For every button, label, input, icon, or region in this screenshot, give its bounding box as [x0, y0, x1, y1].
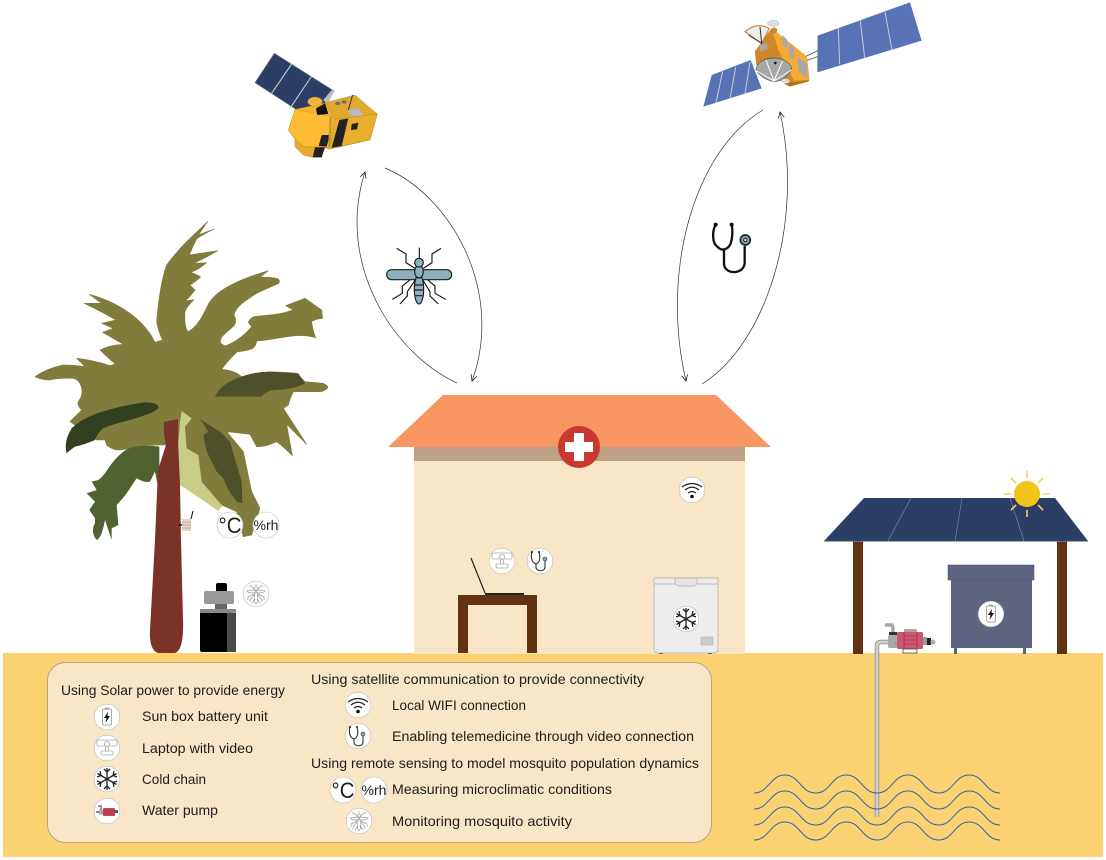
icon: mosquito monitor — [243, 581, 269, 607]
icon: stethoscope in clinic — [527, 548, 553, 574]
sun box battery unit — [948, 565, 1034, 654]
legend heading: solar power: Using Solar power to provide energy — [61, 682, 285, 698]
legend text: microclimate: Measuring microclimatic conditions — [392, 781, 612, 797]
palm fronds — [35, 222, 328, 540]
solar shelter — [824, 498, 1088, 654]
icon: wifi in clinic — [679, 477, 705, 503]
icon: cold chain — [673, 606, 699, 632]
table with laptop — [458, 558, 537, 653]
shelter posts — [853, 541, 1067, 654]
water pipe — [877, 642, 888, 817]
inner dark frond — [200, 419, 242, 503]
legend text: battery: Sun box battery unit — [142, 708, 268, 724]
legend heading: satellite communication: Using satellite communication to provide connectivity — [311, 671, 644, 687]
red cross emblem — [558, 426, 600, 468]
clinic building — [388, 395, 771, 654]
legend icon: stethoscope — [345, 723, 371, 749]
water pump — [885, 625, 936, 653]
icon: mosquito — [387, 248, 452, 304]
clinic wall — [414, 461, 745, 654]
legend text: wifi: Local WIFI connection — [392, 697, 526, 713]
legend text: mosquito activity: Monitoring mosquito activity — [392, 813, 572, 829]
mosquito trap — [200, 583, 236, 652]
icon: stethoscope — [713, 223, 750, 272]
icon: humidity: %rh — [254, 517, 278, 533]
clinic band — [414, 447, 745, 461]
dark frond right — [215, 372, 305, 397]
legend text: water pump: Water pump — [142, 802, 218, 818]
legend icon: mosquito — [346, 808, 372, 834]
sun — [1004, 471, 1050, 517]
legend text: laptop: Laptop with video — [142, 740, 253, 756]
legend heading: remote sensing: Using remote sensing to model mosquito population dynamics — [311, 755, 699, 771]
chest freezer — [654, 578, 718, 654]
microclimate sensor — [179, 511, 193, 531]
legend icon: humidity: %rh — [362, 782, 386, 798]
icon: temperature: °C — [218, 513, 242, 538]
legend icon: water pump — [94, 798, 120, 824]
green lower frond — [87, 446, 159, 540]
earth observation satellite — [255, 53, 377, 157]
palm tree — [35, 222, 328, 653]
light frond — [178, 411, 223, 511]
legend text: telemedicine: Enabling telemedicine through video connection — [392, 728, 694, 744]
icon: webcam in clinic — [489, 548, 515, 574]
legend icon: temperature: °C — [332, 778, 355, 803]
dark frond left — [66, 402, 159, 453]
legend panel — [48, 662, 712, 842]
legend icon: battery — [94, 704, 120, 730]
arrow: clinic to communications satellite — [702, 112, 788, 384]
ground — [3, 653, 1103, 857]
legend icon: webcam — [94, 735, 120, 761]
icon: battery — [978, 601, 1004, 627]
icon: humidity — [253, 512, 279, 538]
solar panel roof — [824, 498, 1088, 541]
clinic roof — [388, 395, 771, 447]
legend icon: snowflake — [94, 766, 120, 792]
arrow: communications satellite to clinic — [677, 110, 763, 381]
arrow: clinic to earth observation satellite — [357, 172, 457, 383]
legend icon: humidity — [361, 777, 387, 803]
legend text: cold chain: Cold chain — [142, 771, 206, 787]
arrow: earth observation satellite to clinic — [385, 168, 482, 381]
communications satellite — [703, 2, 922, 107]
legend icon: wifi — [345, 692, 371, 718]
palm trunk — [150, 419, 183, 653]
groundwater waves — [754, 775, 1000, 840]
